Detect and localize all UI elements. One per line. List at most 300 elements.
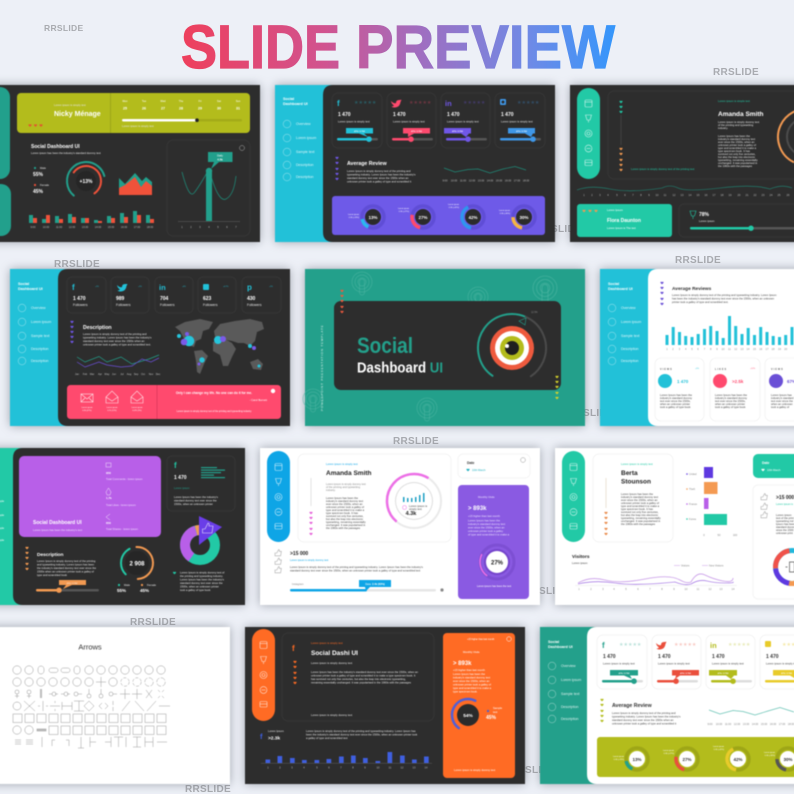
card: facebook: Lorem ipsum is simply text: [338, 120, 370, 124]
card: views: 1 470: [677, 379, 689, 384]
line chart: 17:00: [514, 178, 521, 182]
card: monthly visits: of type and scrambled it to make a: [468, 532, 510, 536]
card: monthly visits: text: [493, 710, 498, 714]
card: stats and donut: unknown print: [776, 531, 793, 535]
card: facebook: f: [174, 461, 177, 470]
heading: Lorem Ipsum is simply dummy text of the printing and typesetting industry. Lorem Ipsum: [672, 293, 777, 297]
panel: olive donuts: 0.3k (+27%): [664, 753, 674, 755]
panel: wave chart: [167, 140, 250, 236]
follower cards: Followers: [203, 303, 218, 307]
donut with wedge: [179, 516, 222, 566]
panel: wave chart: 6: [226, 225, 228, 229]
panel: wave chart: 4.5k: [217, 158, 223, 162]
banner: Sat: [217, 99, 221, 103]
sidebar: Dashboard UI: [18, 287, 43, 291]
bar chart: [261, 752, 432, 770]
panel: profile: unchanged. It was popularised in: [718, 161, 758, 165]
donut caption: took a galley of type book: [180, 588, 211, 592]
card: likes: +12%: [750, 368, 755, 370]
card: twitter: 47% / 2 792: [411, 130, 423, 133]
bar chart: 10: [377, 766, 380, 770]
line chart: Apr: [98, 372, 102, 376]
slide: cover: [303, 269, 585, 426]
card: monthly visits: Lorem ipsum has been the text: [477, 585, 511, 588]
bar chart: [666, 316, 794, 351]
banner: [17, 93, 250, 133]
male female stats: 55%: [33, 172, 44, 178]
card: likes: when an unknown printer: [715, 402, 745, 406]
card: monthly visits: Lorem Ipsum has been the: [453, 672, 485, 676]
follower cards: +1%: [138, 286, 142, 288]
line chart: 17:00: [779, 722, 786, 726]
donut caption: 1500s, when an unknown printer: [180, 584, 219, 588]
watermarks: RRSLIDE: [393, 436, 439, 447]
follower cards: p: [247, 283, 252, 292]
panel: profile: Lorem ipsum is simply dummy text of the printing text: [631, 167, 695, 171]
bar chart: 12: [734, 347, 738, 351]
panel: pink quote: Only I can change my life. No one can do it for me.: [176, 391, 252, 395]
horizontal bar chart: 100: [733, 533, 738, 537]
bar chart: 2: [279, 766, 281, 770]
card: linkedin: [706, 635, 755, 689]
bar chart: 1: [267, 766, 269, 770]
panel: profile: of the printing and typesetting: [718, 123, 754, 127]
line chart: Oct: [141, 372, 145, 376]
follower cards: in: [159, 283, 166, 292]
card: monthly visits: industry's standard dummy text: [453, 676, 490, 680]
bar chart: 7: [340, 766, 342, 770]
visitors: 7: [649, 587, 651, 591]
slide: description and world map: [10, 269, 290, 426]
card: facebook: ★★★★★: [619, 642, 642, 648]
bar chart: 1: [666, 347, 668, 351]
line chart: 18:00: [523, 178, 530, 182]
title: [181, 13, 615, 81]
card: profile: but also the leap into electronic: [621, 513, 659, 517]
card: monthly visits: > 893k: [468, 506, 487, 512]
panel: progress: Lorem ipsum: [699, 219, 715, 223]
description: Lorem Ipsum is simply dummy text of the printing: [37, 559, 96, 563]
panel: pink quote: 0.7k (12%): [107, 410, 117, 412]
visitors: 2: [590, 587, 592, 591]
vertical label: POWERPOINT PRESENTATION TEMPLATE: [320, 325, 324, 411]
bar chart: 8: [352, 766, 354, 770]
card: Flora Daunton: Lorem Ipsum is The text: [607, 226, 636, 230]
bar chart: 4: [303, 766, 305, 770]
donut caption: [173, 570, 225, 592]
panel: profile: Lorem Ipsum has been the: [718, 134, 750, 138]
panel: profile: industry.: [718, 126, 728, 130]
watermarks: RRSLIDE: [510, 765, 556, 776]
card: stats and donut: text of the print: [776, 516, 794, 520]
average review text: Lorem Ipsum is simply dummy text of the printing and: [612, 711, 676, 715]
card: profile: industry's standard dummy text: [326, 499, 363, 503]
follower cards: [67, 277, 281, 313]
card: profile: Stounson: [621, 478, 651, 486]
panel: purple donuts: Lorem ipsum: [448, 203, 459, 206]
panel: pink quote: [67, 385, 281, 419]
description: the industry's standard dummy text ever since the: [37, 566, 97, 570]
panel: profile: Lorem ipsum is simply dummy text: [718, 120, 759, 124]
card: date: [458, 454, 530, 478]
sidebar: Overview: [561, 664, 576, 668]
panel: purple donuts: 0.3k (+42%): [449, 207, 459, 209]
description: type and scrambled book: [37, 573, 68, 577]
card: views purple: took a galley of: [771, 405, 789, 409]
card: profile: Lorem ipsum is simply text: [326, 462, 358, 466]
card: monthly visits: Sample: [493, 706, 503, 710]
visitors: New Visitors: [709, 564, 724, 568]
card: instagram: Lorem ipsum is simply text: [501, 120, 533, 124]
purple card: Social Dashboard UI: [33, 520, 82, 526]
line chart: May: [105, 372, 110, 376]
panel: profile: but also the leap into electronic: [718, 155, 756, 159]
card: monthly visits: Monthly Visits: [463, 650, 480, 654]
card: Flora Daunton: [577, 204, 672, 237]
timeline chart: [577, 186, 792, 197]
panel: purple donuts: 42%: [468, 215, 478, 220]
follower cards: Followers: [116, 303, 131, 307]
bar chart: 13:00: [82, 225, 89, 229]
horizontal bar chart: United: [689, 472, 697, 476]
sidebar: Social: [18, 282, 29, 286]
panel: purple donuts: 0.3k (+30%): [500, 213, 510, 215]
donut caption: Lorem Ipsum is simply dummy text of: [180, 570, 225, 574]
card: views: took a galley of type book: [660, 405, 691, 409]
purple card: [19, 456, 161, 537]
panel: profile: Amanda Smith: [718, 111, 764, 118]
panel: purple donuts: 30%: [519, 215, 529, 220]
hero card: [334, 301, 561, 390]
description: Lorem Ipsum is simply dummy text of the printing and typesetting industry. Lorem Ipsum has: [306, 729, 416, 733]
visitors: 5: [625, 587, 627, 591]
banner: Wed: [160, 99, 166, 103]
hero card: Social: [357, 333, 413, 358]
card: monthly visits: [458, 485, 529, 599]
timeline chart: 14: [689, 193, 692, 197]
card: twitter: Lorem ipsum is simply text: [393, 120, 425, 124]
card: facebook: 1 470: [174, 475, 187, 481]
card: linkedin: ★★★★★: [463, 100, 486, 106]
sidebar: Lorem ipsum: [621, 320, 641, 324]
panel: text: has survived not only five centuries, but also the leap into electronic typesetting,: [311, 677, 406, 681]
panel: text: [282, 633, 434, 721]
panel: profile: Lorem ipsum is simple text: [718, 99, 750, 103]
timeline chart: 22: [754, 193, 757, 197]
icon grid: [13, 666, 170, 748]
card: facebook: f: [337, 99, 340, 108]
donut caption: Lorem Ipsum has been the industry's: [180, 578, 225, 582]
line chart: 14:00: [752, 722, 759, 726]
sidebar: [608, 282, 641, 365]
card: likes: [710, 358, 760, 421]
description: standard dummy text ever since the 1500s when an: [83, 339, 145, 343]
panel: olive donuts: 30%: [783, 757, 793, 762]
card: linkedin: in: [710, 641, 717, 650]
sidebar: Overview: [31, 306, 46, 310]
card: views: [655, 358, 704, 421]
timeline chart: 5: [616, 193, 618, 197]
gauge: 4.3k: [406, 511, 417, 517]
visitors: 11: [697, 587, 700, 591]
stats text: Lorem Ipsum is simply dummy text of the printing and typesetting industry. Lorem Ipsum has been the industry's: [290, 565, 423, 569]
slide: Nicky Ménage dashboard: [0, 85, 260, 242]
panel: wave chart: 4: [208, 225, 210, 229]
timeline chart: 17: [713, 193, 716, 197]
bar chart: 10:00: [43, 225, 50, 229]
card: likes: >2.5k: [732, 379, 744, 384]
follower cards: +1%: [269, 286, 273, 288]
panel: profile: typesetting, remaining essentially: [718, 158, 758, 162]
follower cards: 430: [247, 296, 256, 302]
card: twitter: 1 470: [658, 654, 671, 660]
card: profile: ever since the 1500s, when an: [621, 498, 658, 502]
heading: [672, 286, 777, 304]
visitors: 13: [720, 587, 723, 591]
panel: olive donuts: 0.3k (+30%): [765, 755, 775, 757]
visitors: 3: [602, 587, 604, 591]
line chart: Aug: [127, 372, 132, 376]
card: facebook: 1 470: [603, 654, 616, 660]
purple card: Total Comments - lorem ipsum: [106, 477, 143, 481]
card: facebook: standard dummy text ever since the: [174, 498, 217, 502]
line chart: Mar: [90, 372, 94, 376]
panel: wave chart: 3: [199, 225, 201, 229]
line chart: 15:00: [496, 178, 503, 182]
bar chart: 14: [747, 347, 750, 351]
panel: pink quote: Lorem ipsum is simply dummy text of the printing and typesetting industry: [177, 410, 252, 413]
sidebar: Overview: [621, 306, 636, 310]
hearts: [335, 157, 339, 180]
follower cards: 1 470: [73, 296, 86, 302]
follower cards: Followers: [160, 303, 175, 307]
card: linkedin: in: [445, 99, 452, 108]
card: twitter: [652, 635, 701, 689]
average review text: [612, 703, 681, 726]
watermarks: RRSLIDE: [44, 23, 83, 33]
bar chart: 5: [691, 347, 693, 351]
hearts: [600, 699, 604, 722]
sidebar: Description: [561, 705, 579, 709]
line chart: 16:00: [505, 178, 512, 182]
red hearts: [340, 290, 344, 313]
card: linkedin: Lorem ipsum is simply text: [712, 662, 744, 666]
card: views: Lorem Ipsum has been the: [660, 393, 692, 397]
bar chart: 6: [328, 766, 330, 770]
banner: 29: [198, 106, 202, 110]
card: monthly visits: industry's standard dummy text: [468, 522, 505, 526]
panel: text: remaining essentially unchanged. It was popularised in the 1960s with the passages: [311, 680, 412, 684]
timeline chart: 9: [648, 193, 650, 197]
banner: Lorem ipsum is simply text: [54, 103, 86, 107]
bar chart: 3: [291, 766, 293, 770]
horizontal bar chart: 0: [703, 533, 705, 537]
panel: purple donuts: Lorem ipsum: [348, 213, 359, 216]
line chart: 14:00: [487, 178, 494, 182]
slide: purple Social Dashboard: [0, 448, 245, 605]
panel: wave chart: 7: [235, 225, 237, 229]
bar chart: 10: [722, 347, 725, 351]
card: Flora Daunton: Lorem Ipsum: [607, 208, 623, 212]
card: twitter: ★★★★★: [674, 642, 697, 648]
timeline chart: 6: [624, 193, 626, 197]
slide: Amanda Smith white: [260, 448, 540, 605]
panel: profile: survived not only five centuries,: [718, 152, 756, 156]
card: profile: Lorem Ipsum has been the: [326, 496, 358, 500]
line chart: 11:00: [460, 178, 467, 182]
description: a galley of type and scrambled text: [306, 736, 348, 740]
heading: Social Dashboard UI: [31, 144, 80, 150]
slide: Average Reviews white: [600, 269, 794, 426]
banner: 31: [236, 106, 240, 110]
card: instagram: [760, 635, 794, 689]
bar chart: 11: [728, 347, 731, 351]
panel: purple donuts: 27%: [418, 215, 428, 220]
stat: f: [260, 732, 263, 741]
stats text: >15 000: [290, 551, 308, 557]
card: instagram: 1 470: [766, 654, 779, 660]
card: stats and donut: typesetting ind: [776, 519, 794, 523]
timeline chart: 18: [721, 193, 724, 197]
panel: text: Lorem ipsum is simply text: [311, 641, 343, 645]
bar chart: 16:00: [121, 225, 128, 229]
visitors: 4: [613, 587, 615, 591]
horizontal bar chart: 50: [718, 533, 721, 537]
sidebar: Description: [621, 359, 639, 363]
timeline chart: 8: [640, 193, 642, 197]
panel: profile: ever since the 1500s, when an: [718, 140, 755, 144]
description: been the industry's standard dummy text ever since the 1500s, when an unknown printer took: [306, 732, 418, 736]
panel: olive donuts: Lorem ipsum: [764, 751, 775, 754]
description: Description: [83, 325, 112, 331]
card: profile: unknown printer took a galley of: [326, 505, 364, 509]
timeline chart: 4: [607, 193, 609, 197]
stat: Lorem Ipsum: [268, 729, 284, 733]
bar chart: 2: [672, 347, 674, 351]
slide: Arrows: [0, 627, 230, 784]
card: monthly visits: ever since the 1500s, when an: [453, 679, 490, 683]
card: facebook: [597, 635, 647, 689]
gauge: 2 908: [129, 562, 145, 568]
average review text: typesetting industry. Lorem Ipsum has been the industry's: [612, 714, 681, 718]
bar chart: 13: [741, 347, 744, 351]
sidebar: Description: [561, 717, 579, 721]
gauge: Lorem ipsum is: [409, 504, 428, 508]
line chart: 10:00: [451, 178, 458, 182]
card: profile: the 1960s with the passages: [326, 526, 361, 530]
panel: profile: type and scrambled it to make a: [718, 146, 757, 150]
watermarks: RRSLIDE: [713, 67, 759, 78]
line chart: 13:00: [478, 178, 485, 182]
panel: pink quote: 0.47k (9%): [132, 410, 142, 412]
male female stats: 45%: [33, 189, 44, 195]
card: profile: industry.: [326, 488, 336, 492]
world map: [175, 319, 264, 374]
row 4 mixed: [13, 701, 170, 711]
card: twitter: [387, 93, 436, 148]
panel: olive donuts: 27%: [682, 757, 692, 762]
decorative fingerprints: [303, 272, 557, 421]
card: linkedin: 47% / 2 792: [452, 130, 464, 133]
panel: olive donuts: Lorem ipsum: [713, 745, 724, 748]
title: SLIDE: [181, 13, 340, 81]
line chart: 11:00: [725, 722, 732, 726]
row 5 squares: [13, 714, 166, 722]
card: profile: type specimen book. It has: [326, 511, 359, 515]
panel: text: unknown printer took a galley of type and scrambled it to make a type specimen book. It: [311, 674, 416, 678]
line chart: Dec: [156, 372, 161, 376]
timeline chart: 16: [705, 193, 708, 197]
slide: cyan Average Review: [275, 85, 555, 242]
slide: Amanda Smith dark: [570, 85, 794, 242]
bar chart: 9: [716, 347, 718, 351]
bar chart: 4: [685, 347, 687, 351]
card: monthly visits: ever since the 1500s, when an: [468, 526, 505, 530]
area chart: [119, 173, 152, 195]
card: monthly visits: +15 higher than last month: [468, 514, 500, 518]
card: likes: took a galley of type book: [715, 405, 746, 409]
heading: Average Reviews: [672, 286, 712, 292]
sidebar: Description: [621, 347, 639, 351]
panel: wave chart: 5: [217, 225, 219, 229]
panel: olive donuts: 13%: [632, 757, 642, 762]
card: monthly visits: type specimen book.: [453, 690, 478, 694]
gauge: 55%: [117, 588, 126, 593]
bar chart: 19: [778, 347, 781, 351]
bar chart: 15:00: [108, 225, 115, 229]
card: facebook: ★★★★★: [354, 100, 377, 106]
card: profile: [298, 454, 451, 542]
sidebar: Sample text: [561, 692, 580, 696]
card: views purple: when an unknown: [771, 402, 793, 406]
stats text: Lorem ipsum is simply dummy text: [290, 559, 329, 562]
card: instagram: 47% / 2 792: [516, 130, 528, 133]
card: monthly visits: 54%: [463, 713, 474, 719]
timeline chart: 12: [673, 193, 676, 197]
slider: Data: 2.4k (63%): [365, 582, 385, 586]
card: linkedin: Lorem ipsum is simply text: [447, 120, 479, 124]
sidebar: Social: [283, 97, 294, 101]
banner: Tue: [142, 99, 147, 103]
card: profile: Lorem Ipsum has been the: [621, 492, 653, 496]
visitors: Visitors: [681, 564, 690, 568]
panel: olive donuts: 42%: [733, 757, 743, 762]
eye gauge: 12.5%: [531, 312, 538, 314]
timeline chart: 3: [599, 193, 601, 197]
gauge: [114, 540, 160, 593]
row 7 lines: [15, 737, 167, 748]
row 3 mixed: [15, 689, 164, 699]
banner: Sun: [236, 99, 241, 103]
panel: profile: the 1960s with the passages: [718, 164, 753, 168]
gauge: Female: [147, 583, 156, 587]
panel: olive donuts: 0.3k (+42%): [714, 749, 724, 751]
follower cards: Followers: [73, 303, 88, 307]
bar chart: 9: [364, 766, 366, 770]
timeline chart: 20: [738, 193, 741, 197]
male female stats: Male: [40, 166, 46, 170]
bar chart: 18: [772, 347, 775, 351]
panel: text: Lorem ipsum is simply dummy text: [311, 713, 352, 717]
follower cards: +1%: [95, 286, 99, 288]
follower cards: 623: [203, 296, 212, 302]
card: facebook: [167, 456, 235, 511]
bar chart: 13: [413, 766, 416, 770]
average review text: Lorem Ipsum is simply dummy text of the printing and: [347, 169, 411, 173]
card: likes: Lorem Ipsum has been the: [715, 393, 747, 397]
sidebar: Dashboard UI: [283, 102, 308, 106]
card: profile: industry's standard dummy text: [621, 495, 658, 499]
